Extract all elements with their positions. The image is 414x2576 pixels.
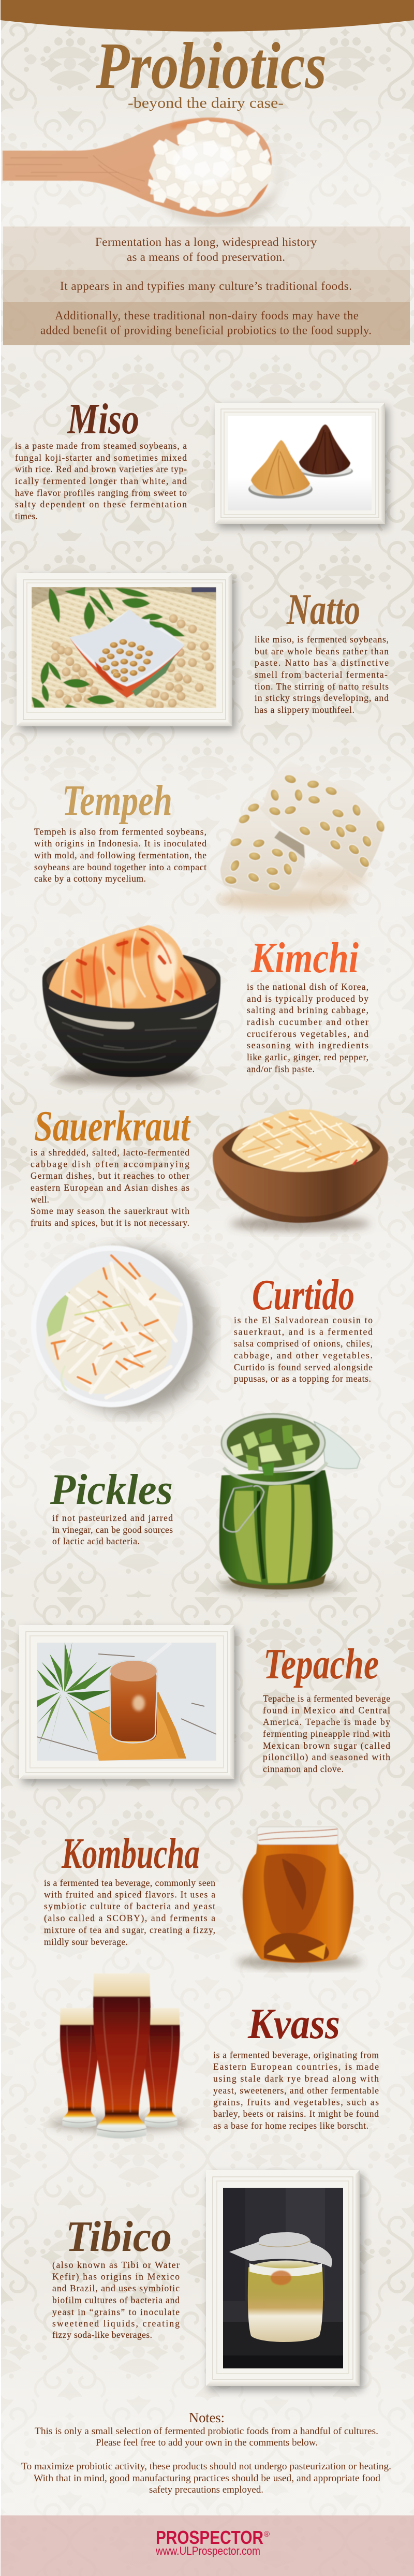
- text: tibico description: sweetened liquids, creating: [52, 2318, 180, 2329]
- image: kimchi bowl: [42, 925, 220, 1086]
- text: kimchi description: salting and brining cabbage,: [247, 1005, 368, 1015]
- framed photo: miso cones: [215, 403, 388, 528]
- website: www.ULProspector.com: [155, 2544, 260, 2557]
- image: curtido plate: [31, 1246, 212, 1413]
- text: miso description: ically fermented longer than white, and: [15, 476, 187, 486]
- intro text: It appears in and typifies many culture’s traditional foods.: [60, 280, 352, 292]
- image: wooden spoon with kefir grains: [3, 118, 282, 225]
- notes text: This is only a small selection of fermented probiotic foods from a handful of cultures.: [35, 2426, 378, 2437]
- text: tibico description: yeast in “grains” to inoculate: [52, 2307, 180, 2317]
- text: kvass description: as a base for home recipes like borscht.: [213, 2120, 368, 2131]
- text: tempeh description: with origins in Indonesia. It is inoculated: [34, 838, 206, 848]
- image: three glasses of kvass: [50, 1973, 190, 2139]
- text: tibico description: and Brazil, and uses symbiotic: [52, 2283, 180, 2293]
- text: tempeh description: cake by a cottony mycelium.: [34, 873, 146, 884]
- text: sauerkraut description: well.: [31, 1194, 49, 1205]
- panel: tibico: [52, 2170, 363, 2390]
- image: tempeh blocks: [217, 761, 387, 910]
- text: tepache description: found in Mexico and Central: [263, 1705, 390, 1716]
- text: pickles description: in vinegar, can be good sources: [52, 1525, 173, 1535]
- registered mark: ®: [264, 2530, 270, 2539]
- text: miso description: times.: [15, 511, 38, 521]
- heading: kombucha: Kombucha: [61, 1829, 200, 1878]
- notes text: safety precautions employed.: [149, 2484, 263, 2495]
- text: curtido description: cabbage, and other vegetables.: [234, 1350, 373, 1360]
- intro text: Fermentation has a long, widespread history: [95, 236, 317, 248]
- text: curtido description: salsa comprised of onions, chiles,: [234, 1338, 373, 1349]
- heading: sauerkraut: Sauerkraut: [34, 1102, 191, 1150]
- header brown band: [1, 0, 414, 32]
- image: pickle jar: [218, 1414, 360, 1594]
- text: kimchi description: cruciferous vegetables, and: [247, 1029, 368, 1039]
- text: kvass description: [213, 2050, 379, 2131]
- text: tempeh description: Tempeh is also from fermented soybeans,: [34, 826, 206, 837]
- text: miso description: have flavor profiles ranging from sweet to: [15, 488, 187, 498]
- text: kombucha description: mildly sour beverage.: [44, 1937, 128, 1947]
- panel: sauerkraut: [31, 1102, 388, 1231]
- text: curtido description: sauerkraut, and is a fermented: [234, 1327, 373, 1337]
- text: tempeh description: [34, 826, 206, 884]
- text: sauerkraut description: fruits and spices, but it is not necessary.: [31, 1218, 189, 1228]
- framed photo: tepache: [19, 1625, 238, 1783]
- intro text: as a means of food preservation.: [127, 251, 285, 264]
- text: kvass description: using stale dark rye bread along with: [213, 2073, 379, 2084]
- text: natto description: paste. Natto has a distinctive: [255, 657, 389, 668]
- notes text: [21, 2426, 391, 2495]
- text: kimchi description: seasoning with ingredients: [247, 1040, 368, 1050]
- text: pickles description: if not pasteurized and jarred: [52, 1513, 173, 1523]
- text: kimchi description: like garlic, ginger, red pepper,: [247, 1052, 368, 1062]
- heading: kvass: Kvass: [247, 2000, 340, 2048]
- text: kombucha description: (also called a SCOBY), and ferments a: [44, 1913, 215, 1923]
- text: tibico description: [52, 2260, 180, 2340]
- text: sauerkraut description: [31, 1147, 189, 1228]
- heading: tempeh: Tempeh: [62, 777, 172, 825]
- text: tepache description: America. Tepache is made by: [263, 1717, 390, 1727]
- text: kombucha description: with fruited and spiced flavors. It uses a: [44, 1890, 215, 1900]
- heading: tepache: Tepache: [263, 1640, 379, 1688]
- text: tepache description: fermenting pineapple rind with: [263, 1729, 390, 1739]
- text: miso description: is a paste made from steamed soybeans, a: [15, 441, 187, 451]
- text: kimchi description: is the national dish of Korea,: [247, 982, 368, 992]
- logo: prospector: PROSPECTOR: [156, 2527, 263, 2548]
- text: miso description: fungal koji-starter and sometimes mixed: [15, 452, 187, 463]
- heading: tibico: Tibico: [66, 2213, 172, 2261]
- notes: [21, 2410, 391, 2495]
- framed photo: tibico jar: [206, 2170, 363, 2390]
- text: kvass description: Eastern European countries, is made: [213, 2061, 379, 2072]
- panel: miso: [15, 395, 388, 528]
- text: kvass description: grains, fruits and vegetables, such as: [213, 2097, 379, 2107]
- title: Probiotics: [95, 29, 327, 103]
- heading: natto: Natto: [286, 586, 360, 634]
- text: curtido description: Curtido is found served alongside: [234, 1362, 373, 1372]
- text: tibico description: fizzy soda-like beverages.: [52, 2330, 152, 2340]
- text: natto description: has a slippery mouthfeel.: [255, 705, 354, 715]
- heading: curtido: Curtido: [252, 1271, 354, 1319]
- panel: tepache: [19, 1625, 390, 1783]
- intro text: Additionally, these traditional non-dairy foods may have the: [55, 309, 359, 322]
- intro text: added benefit of providing beneficial probiotics to the food supply.: [40, 324, 372, 336]
- text: tepache description: [263, 1693, 390, 1774]
- text: natto description: in sticky strings developing, and: [255, 693, 389, 703]
- text: sauerkraut description: Some may season the sauerkraut with: [31, 1206, 189, 1216]
- text: miso description: with rice. Red and brown varieties are typ-: [15, 464, 187, 474]
- text: sauerkraut description: cabbage dish often accompanying: [31, 1159, 189, 1169]
- panel: pickles: [50, 1414, 360, 1594]
- text: kombucha description: symbiotic culture of bacteria and yeast: [44, 1901, 215, 1911]
- text: kvass description: yeast, sweeteners, and other fermentable: [213, 2085, 379, 2096]
- text: tibico description: (also known as Tibi or Water: [52, 2260, 180, 2270]
- text: sauerkraut description: German dishes, but it reaches to other: [31, 1170, 189, 1181]
- text: kimchi description: [247, 982, 368, 1074]
- text: tepache description: Tepache is a fermented beverage: [263, 1693, 390, 1704]
- panel: natto: [17, 573, 389, 730]
- panel: intro bands: [3, 227, 410, 345]
- panel: tempeh: [34, 761, 387, 910]
- text: natto description: like miso, is fermented soybeans,: [255, 634, 389, 645]
- panel: kimchi: [42, 925, 368, 1086]
- text: tempeh description: with mold, and following fermentation, the: [34, 850, 206, 860]
- image: sauerkraut in wooden bowl: [213, 1109, 388, 1231]
- image: kombucha jar: [236, 1827, 362, 1968]
- text: natto description: [255, 634, 389, 715]
- text: curtido description: is the El Salvadorean cousin to: [234, 1315, 373, 1325]
- text: pickles description: of lactic acid bacteria.: [52, 1536, 140, 1546]
- notes heading: Notes:: [189, 2410, 225, 2425]
- text: kombucha description: mixture of tea and sugar, creating a fizzy,: [44, 1925, 215, 1935]
- text: tibico description: Kefir) has origins in Mexico: [52, 2272, 180, 2282]
- subtitle: -beyond the dairy case-: [128, 95, 284, 111]
- notes text: To maximize probiotic activity, these products should not undergo pasteurization or heating.: [21, 2461, 391, 2472]
- notes text: Please feel free to add your own in the comments below.: [96, 2437, 318, 2448]
- heading: kimchi: Kimchi: [250, 934, 359, 982]
- text: tepache description: Mexican brown sugar (called: [263, 1740, 390, 1751]
- text: curtido description: [234, 1315, 373, 1384]
- text: curtido description: pupusas, or as a topping for meats.: [234, 1373, 371, 1384]
- text: miso description: salty dependent on these fermentation: [15, 499, 187, 509]
- text: kombucha description: is a fermented tea beverage, commonly seen: [44, 1878, 215, 1888]
- framed photo: natto: [17, 573, 235, 730]
- text: sauerkraut description: eastern European and Asian dishes as: [31, 1182, 189, 1193]
- intro text: [40, 236, 372, 336]
- text: natto description: but are whole beans rather than: [255, 646, 389, 656]
- text: kimchi description: and is typically produced by: [247, 993, 368, 1004]
- text: kvass description: barley, beets or raisins. It might be found: [213, 2109, 379, 2119]
- heading: pickles: Pickles: [50, 1466, 173, 1514]
- text: miso description: [15, 441, 187, 521]
- text: tibico description: biofilm cultures of bacteria and: [52, 2295, 180, 2305]
- panel: kvass: [50, 1973, 379, 2139]
- text: kimchi description: radish cucumber and other: [247, 1017, 368, 1027]
- text: sauerkraut description: is a shredded, salted, lacto-fermented: [31, 1147, 189, 1158]
- notes text: With that in mind, good manufacturing practices should be used, and appropriate food: [34, 2473, 380, 2484]
- panel: kombucha: [44, 1827, 362, 1968]
- text: tempeh description: soybeans are bound together into a compact: [34, 862, 206, 872]
- text: tepache description: piloncillo) and seasoned with: [263, 1752, 390, 1762]
- text: pickles description: [52, 1513, 173, 1546]
- text: tepache description: cinnamon and clove.: [263, 1764, 344, 1774]
- text: kvass description: is a fermented beverage, originating from: [213, 2050, 379, 2060]
- heading: miso: Miso: [66, 395, 139, 443]
- text: natto description: tion. The stirring of natto results: [255, 681, 389, 692]
- text: natto description: smell from bacterial fermenta-: [255, 669, 388, 680]
- text: kombucha description: [44, 1878, 215, 1947]
- text: kimchi description: and/or fish paste.: [247, 1064, 315, 1074]
- footer band: [1, 2515, 414, 2576]
- panel: curtido: [31, 1246, 373, 1413]
